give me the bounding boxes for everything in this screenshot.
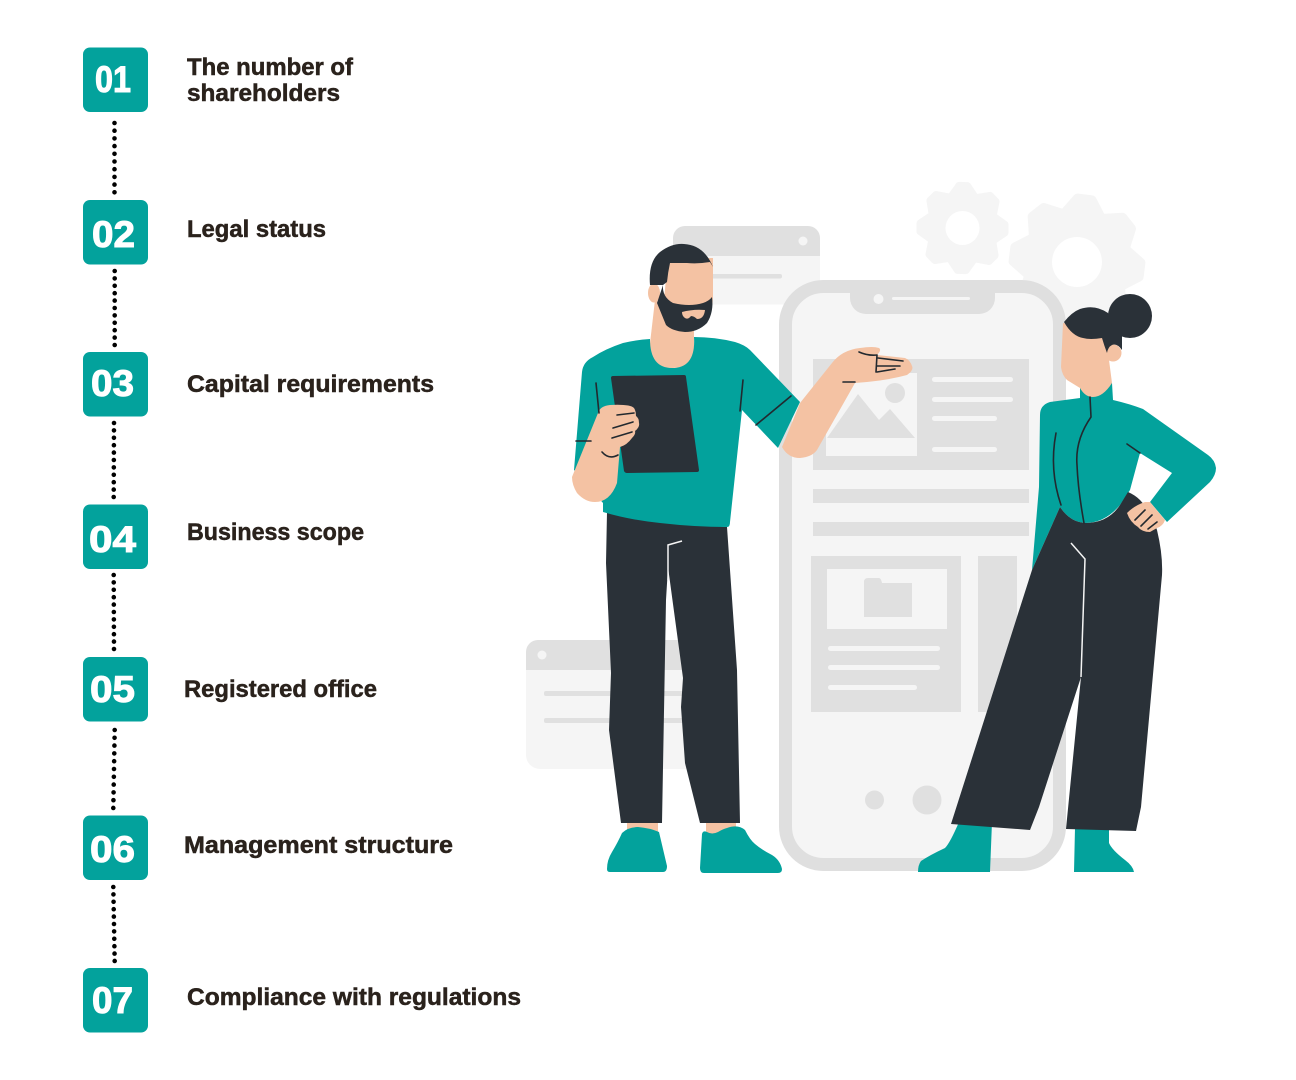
back window: top: [673, 226, 820, 304]
man beard: [657, 285, 712, 332]
man mouth: [682, 310, 705, 319]
connector 05 to 06: [113, 730, 115, 808]
man ear: [648, 284, 660, 302]
step 01: [83, 48, 354, 112]
man detail lines: [576, 352, 903, 457]
step 03: [83, 352, 434, 416]
woman detail lines: [1053, 397, 1157, 529]
connector 01 to 02: [112, 123, 117, 194]
connector 03 to 04: [111, 423, 116, 498]
man neck: [649, 300, 694, 368]
man hair: [650, 244, 713, 285]
man raised arm: [782, 347, 912, 458]
step 07: Compliance with regulations: [187, 984, 521, 1011]
man trousers: [606, 512, 740, 823]
step 03: 03: [91, 363, 134, 404]
man head: [664, 258, 713, 326]
step 05: 05: [90, 669, 135, 710]
step 02: 02: [92, 214, 135, 255]
screen: image card: [813, 359, 1029, 470]
trouser seam: [668, 541, 682, 580]
step 01: shareholders: [187, 80, 340, 107]
connector 04 to 05: [111, 575, 116, 650]
step 07: 07: [92, 980, 133, 1021]
panel: numbered list: [83, 48, 521, 1032]
connector 02 to 03: [112, 271, 117, 346]
woman ear: [1104, 344, 1122, 362]
step 06: [83, 816, 453, 880]
woman hair: [1064, 307, 1122, 353]
figure: man: [572, 244, 912, 873]
phone: [786, 286, 1060, 864]
step 05: [83, 657, 377, 722]
woman trousers: [951, 492, 1162, 831]
icon: small gear: [920, 186, 1005, 270]
man ankles: [627, 820, 736, 834]
step 04: [83, 504, 364, 569]
screen: side card: [978, 556, 1017, 712]
woman shirt: [1032, 380, 1216, 570]
man holding hand: [572, 405, 639, 502]
woman head: [1061, 323, 1112, 397]
step 06: Management structure: [184, 832, 453, 859]
woman hand: [1127, 502, 1165, 532]
step 01: The number of: [187, 54, 354, 81]
step 05: Registered office: [184, 676, 377, 703]
icon: large gear: [1012, 197, 1142, 327]
back window: left: [526, 640, 695, 769]
connector 06 to 07: [113, 887, 115, 962]
step 06: 06: [90, 829, 135, 870]
tablet: [611, 375, 699, 473]
step 07: [83, 968, 521, 1032]
screen: folder card: [811, 556, 961, 712]
woman shoes: [918, 822, 1134, 872]
trouser seam: [1071, 543, 1085, 677]
illustration: phone with two people: [526, 186, 1216, 873]
step 02: Legal status: [187, 216, 326, 243]
phone buttons: [865, 786, 942, 814]
step 04: 04: [89, 519, 136, 560]
step 02: [83, 200, 326, 264]
woman hair bun: [1108, 294, 1152, 338]
screen: bars: [813, 489, 1029, 536]
man shoes: [607, 826, 782, 873]
phone notch: [850, 290, 995, 314]
step 04: Business scope: [187, 519, 364, 546]
step 01: 01: [95, 59, 131, 100]
figure: woman: [918, 294, 1216, 872]
step 03: Capital requirements: [187, 371, 434, 398]
man shirt: [574, 337, 800, 527]
